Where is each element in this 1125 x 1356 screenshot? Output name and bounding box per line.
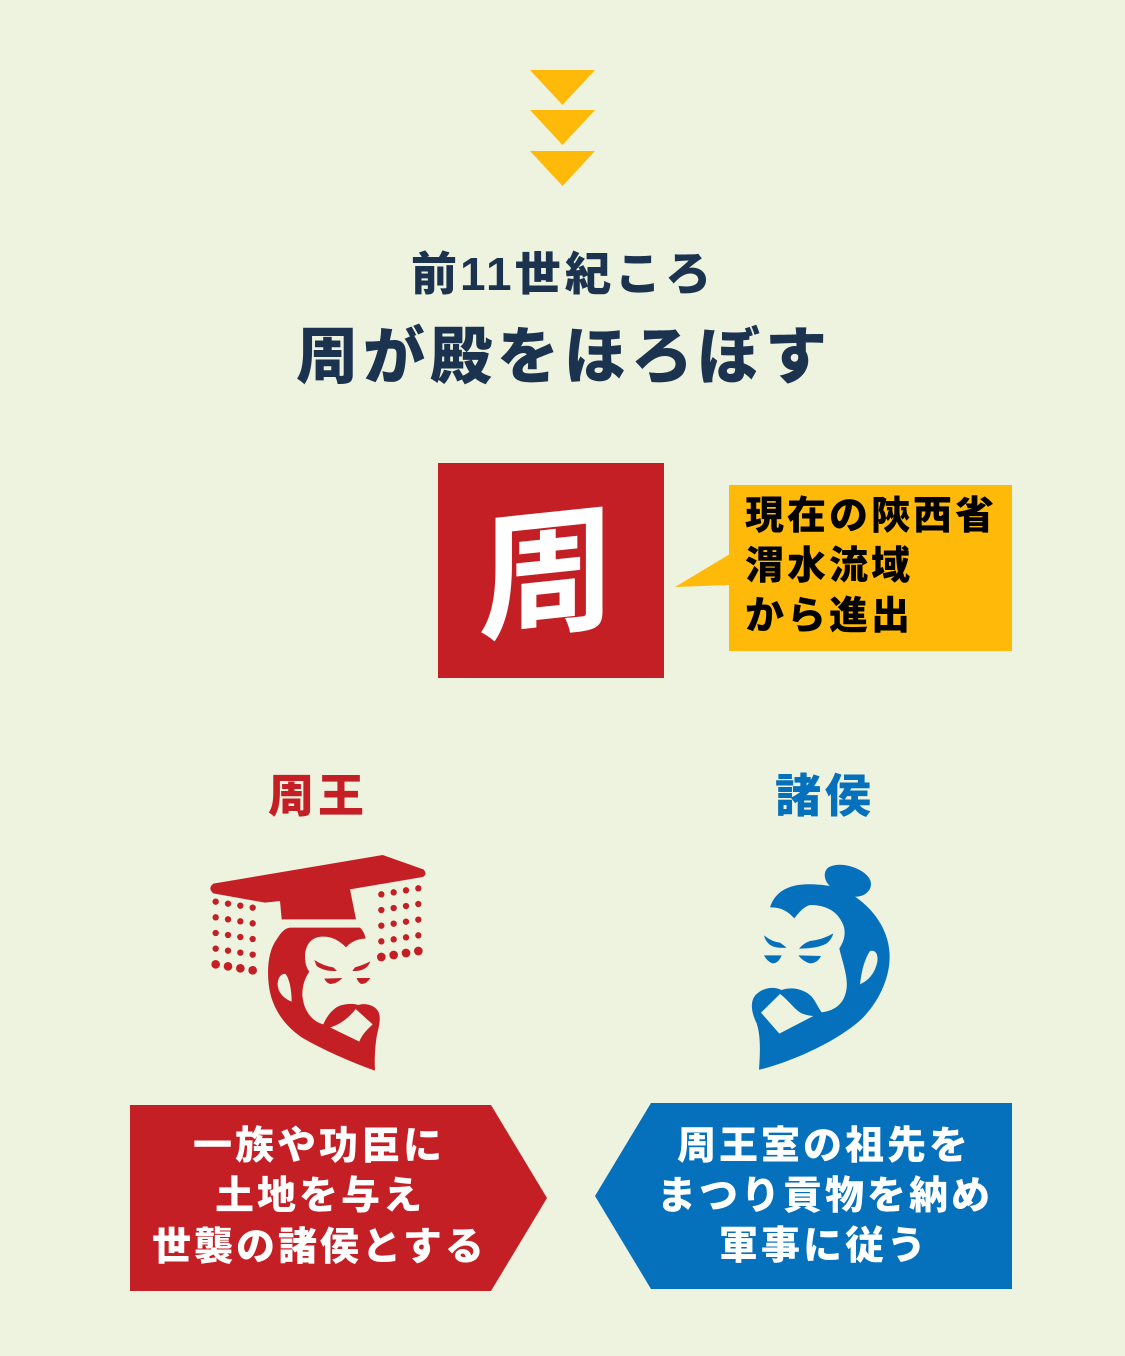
callout: Shaanxi origin: から進出 <box>745 595 913 638</box>
panel: Zhou king role: 一族や功臣に <box>193 1125 445 1168</box>
heading: period: 前11世紀ころ <box>411 248 715 300</box>
panel: feudal lords role <box>595 1103 1012 1289</box>
panel: feudal lords role: まつり貢物を納め <box>657 1175 993 1218</box>
arrow: three downward chevrons <box>530 70 595 186</box>
callout: Shaanxi origin: 渭水流域 <box>745 545 913 588</box>
heading: feudal lords: 諸侯 <box>775 770 875 822</box>
callout: Shaanxi origin: 現在の陝西省 <box>745 495 997 538</box>
icon: Zhou king face <box>210 855 426 1071</box>
panel: Zhou king role: 世襲の諸侯とする <box>152 1226 487 1269</box>
heading: main title: 周が殿をほろぼす <box>296 323 832 392</box>
panel: feudal lords role: 軍事に従う <box>719 1225 929 1268</box>
callout: Shaanxi origin <box>675 485 1012 651</box>
panel: feudal lords role: 周王室の祖先を <box>677 1125 971 1168</box>
heading: Zhou king: 周王 <box>268 770 368 822</box>
icon: feudal lord face <box>752 864 890 1070</box>
panel: Zhou character tile <box>438 463 664 678</box>
panel: Zhou character tile: 周 <box>478 492 616 660</box>
panel: Zhou king role: 土地を与え <box>215 1175 425 1218</box>
panel: Zhou king role <box>130 1105 547 1291</box>
